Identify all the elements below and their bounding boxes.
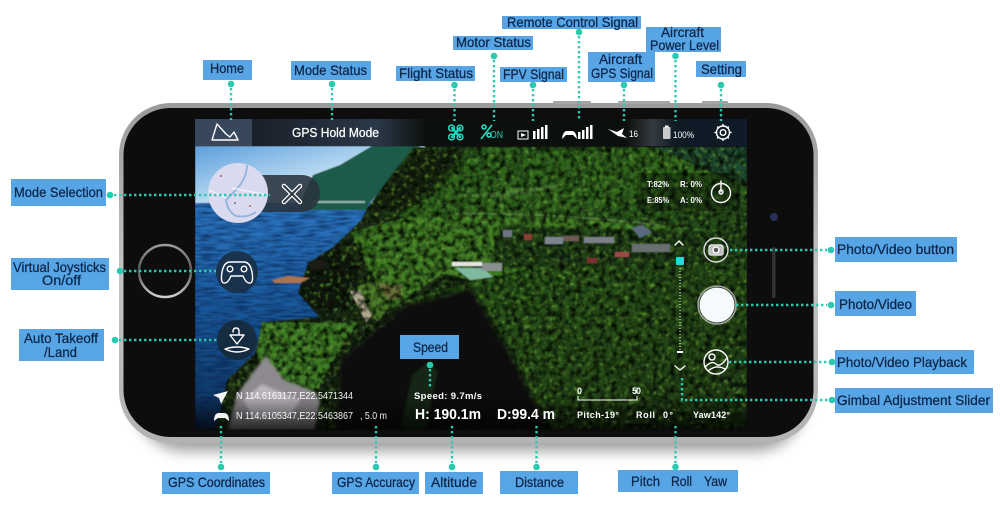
home tab: [195, 119, 252, 146]
label: distance: Distance: [515, 474, 564, 490]
scale and attitude readout: 50: [632, 386, 641, 396]
connector: power level: [672, 53, 679, 121]
speed altitude distance readout: D:99.4 m: [497, 406, 555, 423]
icon: flight status drone: [449, 125, 463, 140]
speed altitude distance readout: H: 190.1m: [415, 406, 481, 423]
aerial photo background: [195, 146, 747, 430]
label: GPS coordinates: [162, 472, 270, 494]
label: auto takeoff land: Auto Takeoff: [24, 330, 98, 346]
label: pitch roll yaw: [618, 470, 738, 492]
connector: aircraft GPS signal: [621, 82, 627, 121]
virtual joystick button: [216, 251, 258, 293]
icon: home button: [139, 245, 191, 297]
label: auto takeoff land: /Land: [44, 344, 77, 360]
scale and attitude readout: 0: [577, 386, 582, 396]
connector: home: [228, 81, 234, 120]
map selector and mode pill: [208, 163, 320, 223]
label: pitch roll yaw: Roll: [671, 473, 692, 489]
gimbal slider: [675, 241, 685, 370]
label: aircraft GPS signal: GPS Signal: [591, 65, 653, 81]
label: motor status: Motor Status: [456, 34, 531, 50]
top status bar: [195, 119, 747, 146]
icon: home: [212, 124, 238, 140]
icon: settings gear: [715, 124, 731, 140]
connector: speed: [427, 362, 433, 388]
label: FPV signal: FPV Signal: [503, 66, 564, 82]
connector: playback: [729, 359, 835, 365]
shutter button: [698, 286, 736, 324]
connector: GPS coordinates: [218, 426, 224, 470]
connector: altitude: [449, 426, 455, 470]
icon: FPV signal: [518, 125, 548, 139]
auto takeoff land button: [217, 320, 257, 360]
label: photo video playback: [835, 350, 974, 374]
tennis court and buildings: [452, 225, 670, 280]
phone body: [119, 101, 818, 443]
scale and attitude readout: Roll: [636, 410, 655, 420]
label: mode selection: [11, 179, 106, 206]
connector: motor status: [491, 53, 497, 121]
rock streaks: [352, 281, 395, 321]
connector: FPV signal: [530, 82, 536, 121]
icon: motor status: ON: [490, 129, 503, 141]
map thumbnail: [208, 163, 268, 223]
connector: gimbal slider: [682, 378, 835, 403]
photo video switch button: [704, 238, 728, 262]
label: aircraft power level: Power Level: [650, 37, 719, 53]
label: gimbal adjustment slider: [835, 388, 993, 413]
icon: motor status: [481, 125, 503, 141]
flight telemetry readout: A: 0%: [680, 195, 702, 205]
connector: GPS accuracy: [373, 426, 379, 470]
label: home: Home: [210, 60, 244, 76]
label: GPS coordinates: GPS Coordinates: [168, 474, 265, 490]
label: GPS accuracy: GPS Accuracy: [337, 474, 415, 490]
connector: mode selection: [107, 192, 270, 198]
white cliff rock: [228, 356, 320, 430]
mode status text: GPS Hold Mode: [292, 126, 379, 140]
label: auto takeoff land: [19, 329, 104, 361]
upper hillside: [385, 147, 747, 232]
GPS coordinates readout: N 114.6105347,E22.5463867: [236, 410, 353, 422]
scale and attitude readout: Yaw142°: [693, 410, 730, 420]
label: pitch roll yaw: Pitch: [631, 473, 660, 489]
rocky shoal: [272, 276, 310, 283]
label: virtual joysticks on/off: [11, 258, 109, 290]
connector: flight status: [451, 82, 458, 121]
label: mode selection: Mode Selection: [14, 184, 103, 200]
label: aircraft power level: [646, 24, 721, 53]
scale and attitude readout: [577, 386, 730, 420]
icon: gamepad: [221, 262, 253, 283]
label: altitude: Altitude: [431, 474, 477, 490]
icon: remote control signal: [562, 125, 592, 139]
icon: GPS satellite signal: 16: [629, 129, 638, 140]
label: setting: Setting: [701, 61, 742, 77]
label: remote control signal: Remote Control Signal: [507, 14, 638, 30]
terrace slope: [351, 217, 747, 307]
icon: takeoff arrow: [225, 328, 249, 352]
playback button: [704, 350, 728, 374]
icon: aircraft location arrow: [213, 391, 228, 404]
front camera: [770, 213, 778, 221]
scale and attitude readout: 0°: [663, 410, 673, 420]
connector: photo video button: [730, 247, 834, 253]
flight telemetry readout: E:85%: [647, 195, 669, 205]
label: aircraft GPS signal: Aircraft: [599, 51, 642, 67]
speed altitude distance readout: [414, 391, 555, 423]
label: photo video button: Photo/Video button: [837, 241, 954, 257]
label: mode status: Mode Status: [294, 62, 367, 78]
label: virtual joysticks on/off: On/off: [42, 272, 81, 288]
connector: pitch roll yaw: [672, 426, 679, 470]
label: flight status: Flight Status: [399, 65, 473, 81]
flight telemetry readout: R: 0%: [680, 179, 702, 189]
connector: mode status: [329, 81, 335, 120]
phone shadow: [135, 145, 805, 451]
right forest: [407, 262, 747, 430]
icon: GPS satellite signal: [608, 128, 638, 140]
speaker: [772, 247, 776, 298]
label: distance: [500, 471, 578, 494]
label: aircraft GPS signal: [588, 51, 655, 82]
icon: battery power: [663, 126, 694, 141]
speed altitude distance readout: Speed: 9.7m/s: [414, 391, 482, 402]
connector: virtual joysticks: [117, 268, 216, 274]
GPS coordinates readout: , 5.0 m: [360, 410, 387, 422]
flight telemetry readout: T:82%: [647, 179, 669, 189]
icon: controller location: [214, 413, 229, 421]
label: photo video playback: Photo/Video Playback: [837, 354, 968, 370]
label: GPS accuracy: [332, 472, 419, 494]
scale and attitude readout: Pitch-19°: [577, 410, 619, 420]
connector: distance: [533, 426, 540, 470]
icon: compass: [712, 181, 730, 202]
bottom shade: [195, 395, 747, 430]
telemetry backing: [637, 173, 739, 211]
village band: [490, 226, 747, 268]
label: speed: [400, 335, 459, 359]
peninsula: [256, 322, 358, 393]
GPS coordinates readout: N 114.6163177,E22.5471344: [236, 390, 353, 402]
icon: battery power: 100%: [673, 130, 694, 141]
dark shadow hill: [335, 288, 550, 430]
label: photo video: Photo/Video: [839, 296, 912, 312]
label: home: [203, 60, 252, 80]
dark coast rocks: [298, 247, 362, 318]
GPS coordinates readout: [213, 390, 387, 422]
label: pitch roll yaw: Yaw: [704, 473, 728, 489]
label: virtual joysticks on/off: Virtual Joysticks: [13, 259, 106, 275]
flight telemetry readout: [647, 179, 730, 205]
connector: photo video: [736, 302, 834, 308]
label: speed: Speed: [413, 339, 448, 355]
connector: setting: [718, 82, 724, 121]
connector: remote control signal: [576, 29, 582, 121]
mode pill: [240, 175, 320, 212]
connector: auto takeoff: [112, 337, 217, 343]
label: gimbal adjustment slider: Gimbal Adjustment Slider: [837, 392, 990, 408]
icon: quadcopter mode: [284, 186, 300, 202]
label: altitude: [425, 472, 483, 494]
label: aircraft power level: Aircraft: [661, 24, 704, 40]
label: photo video button: [835, 237, 957, 262]
label: photo video: [835, 291, 916, 316]
